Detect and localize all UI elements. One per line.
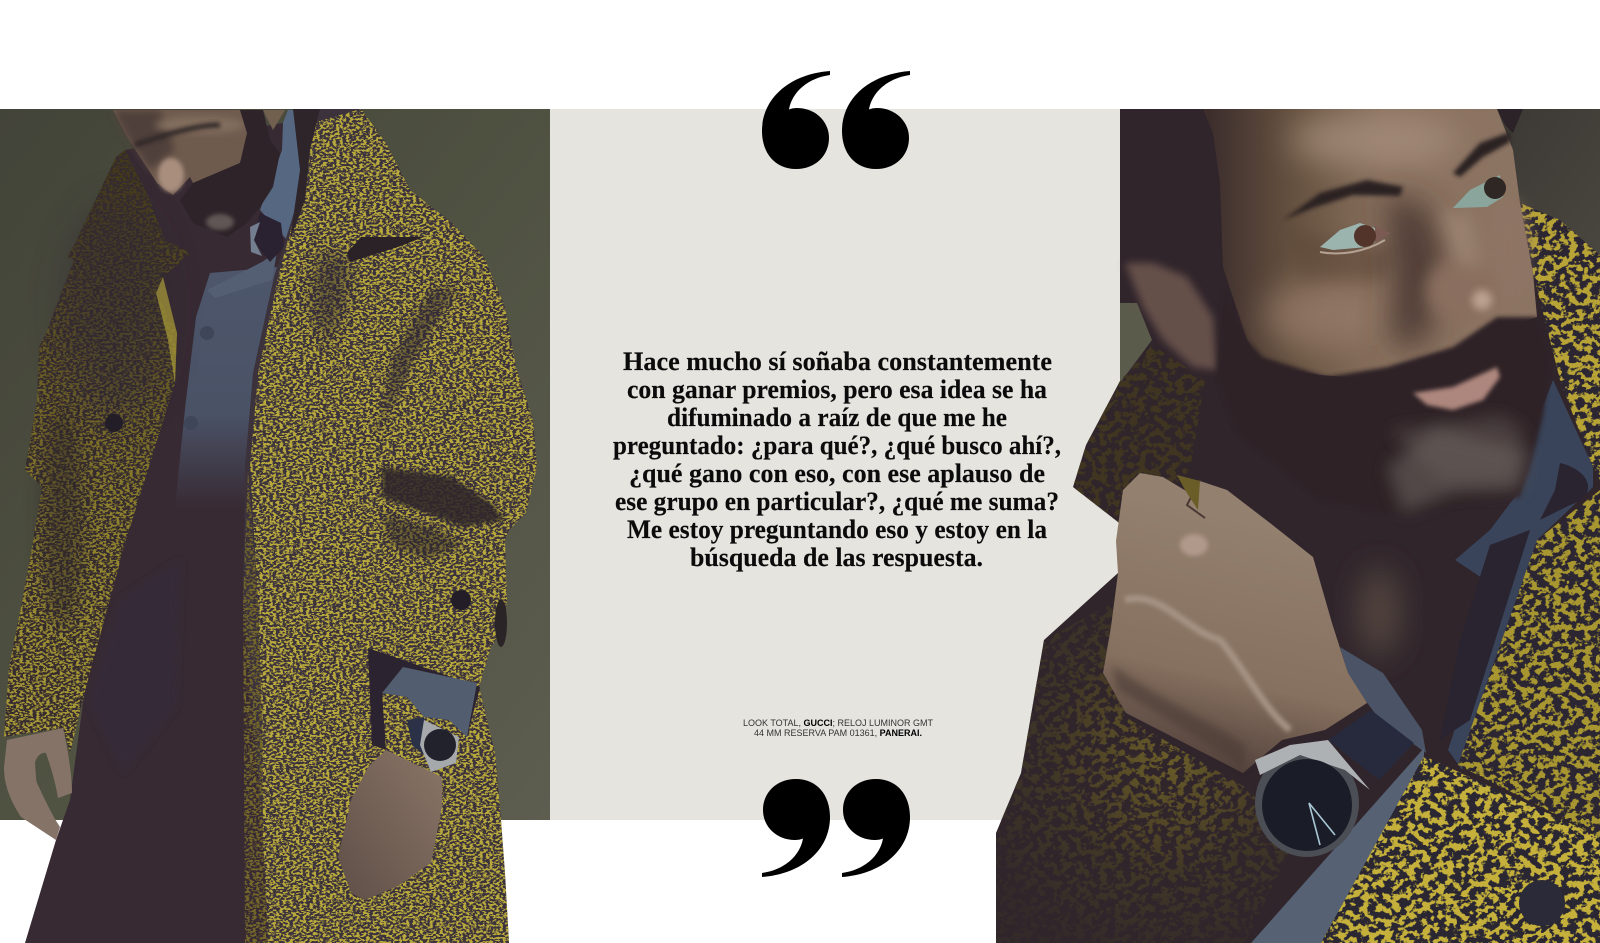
backdrop patches [1120,109,1600,383]
dark coat flecks [996,345,1290,943]
head: downcast face [113,110,285,237]
chest highlight [1359,567,1399,657]
beard and moustache [1216,314,1549,514]
quote text: ese grupo en particular?, ¿qué me suma? [615,487,1059,516]
shirt cuff behind hand [1340,647,1426,753]
quote mark: closing [762,779,910,877]
hand holding collar [1103,473,1367,773]
photo credit caption: 44 MM RESERVA PAM 01361, PANERAI. [754,728,922,738]
blue shirt [88,110,307,773]
blue shirt [1440,380,1593,770]
coat: right panel and sleeve [243,109,537,943]
photo credit caption [743,718,934,738]
shirt cuff [368,648,480,750]
wrist watch [407,717,459,772]
left hand [4,728,72,840]
quote text: ¿qué gano con eso, con ese aplauso de [629,459,1045,488]
dark undershirt and trousers [25,120,310,943]
eyebrows [1283,132,1510,220]
quote mark: opening [762,71,910,169]
quote text: difuminado a raíz de que me he [667,403,1007,432]
quote text: Me estoy preguntando eso y estoy en la [627,515,1047,544]
blue sleeve lining [1251,748,1424,943]
watch [1255,710,1414,857]
quote text [613,347,1061,572]
yellow cuff [1321,756,1600,943]
quote text: búsqueda de las respuesta. [690,543,983,572]
yellow coat: upper right [1520,203,1600,480]
ear [1125,263,1217,370]
quote text: Hace mucho sí soñaba constantemente [623,347,1052,376]
quote text: preguntado: ¿para qué?, ¿qué busco ahí?, [613,431,1061,460]
photo credit caption: LOOK TOTAL, GUCCI; RELOJ LUMINOR GMT [743,718,934,728]
panel: centre quote background [550,109,1121,820]
coat button [1519,880,1565,926]
photo: standing man in tweed coat [0,109,550,943]
photo backdrop [0,109,550,820]
coat: left panel [4,150,190,753]
face [1203,109,1537,380]
eye: viewer's left [1320,223,1390,254]
photo: close-up portrait [996,109,1600,943]
portrait base silhouette [996,109,1600,943]
hair [1497,109,1523,133]
yellow coat: lower right [1458,490,1600,837]
eye: viewer's right [1453,175,1506,208]
right hand [338,750,442,900]
quote text: con ganar premios, pero esa idea se ha [627,375,1047,404]
